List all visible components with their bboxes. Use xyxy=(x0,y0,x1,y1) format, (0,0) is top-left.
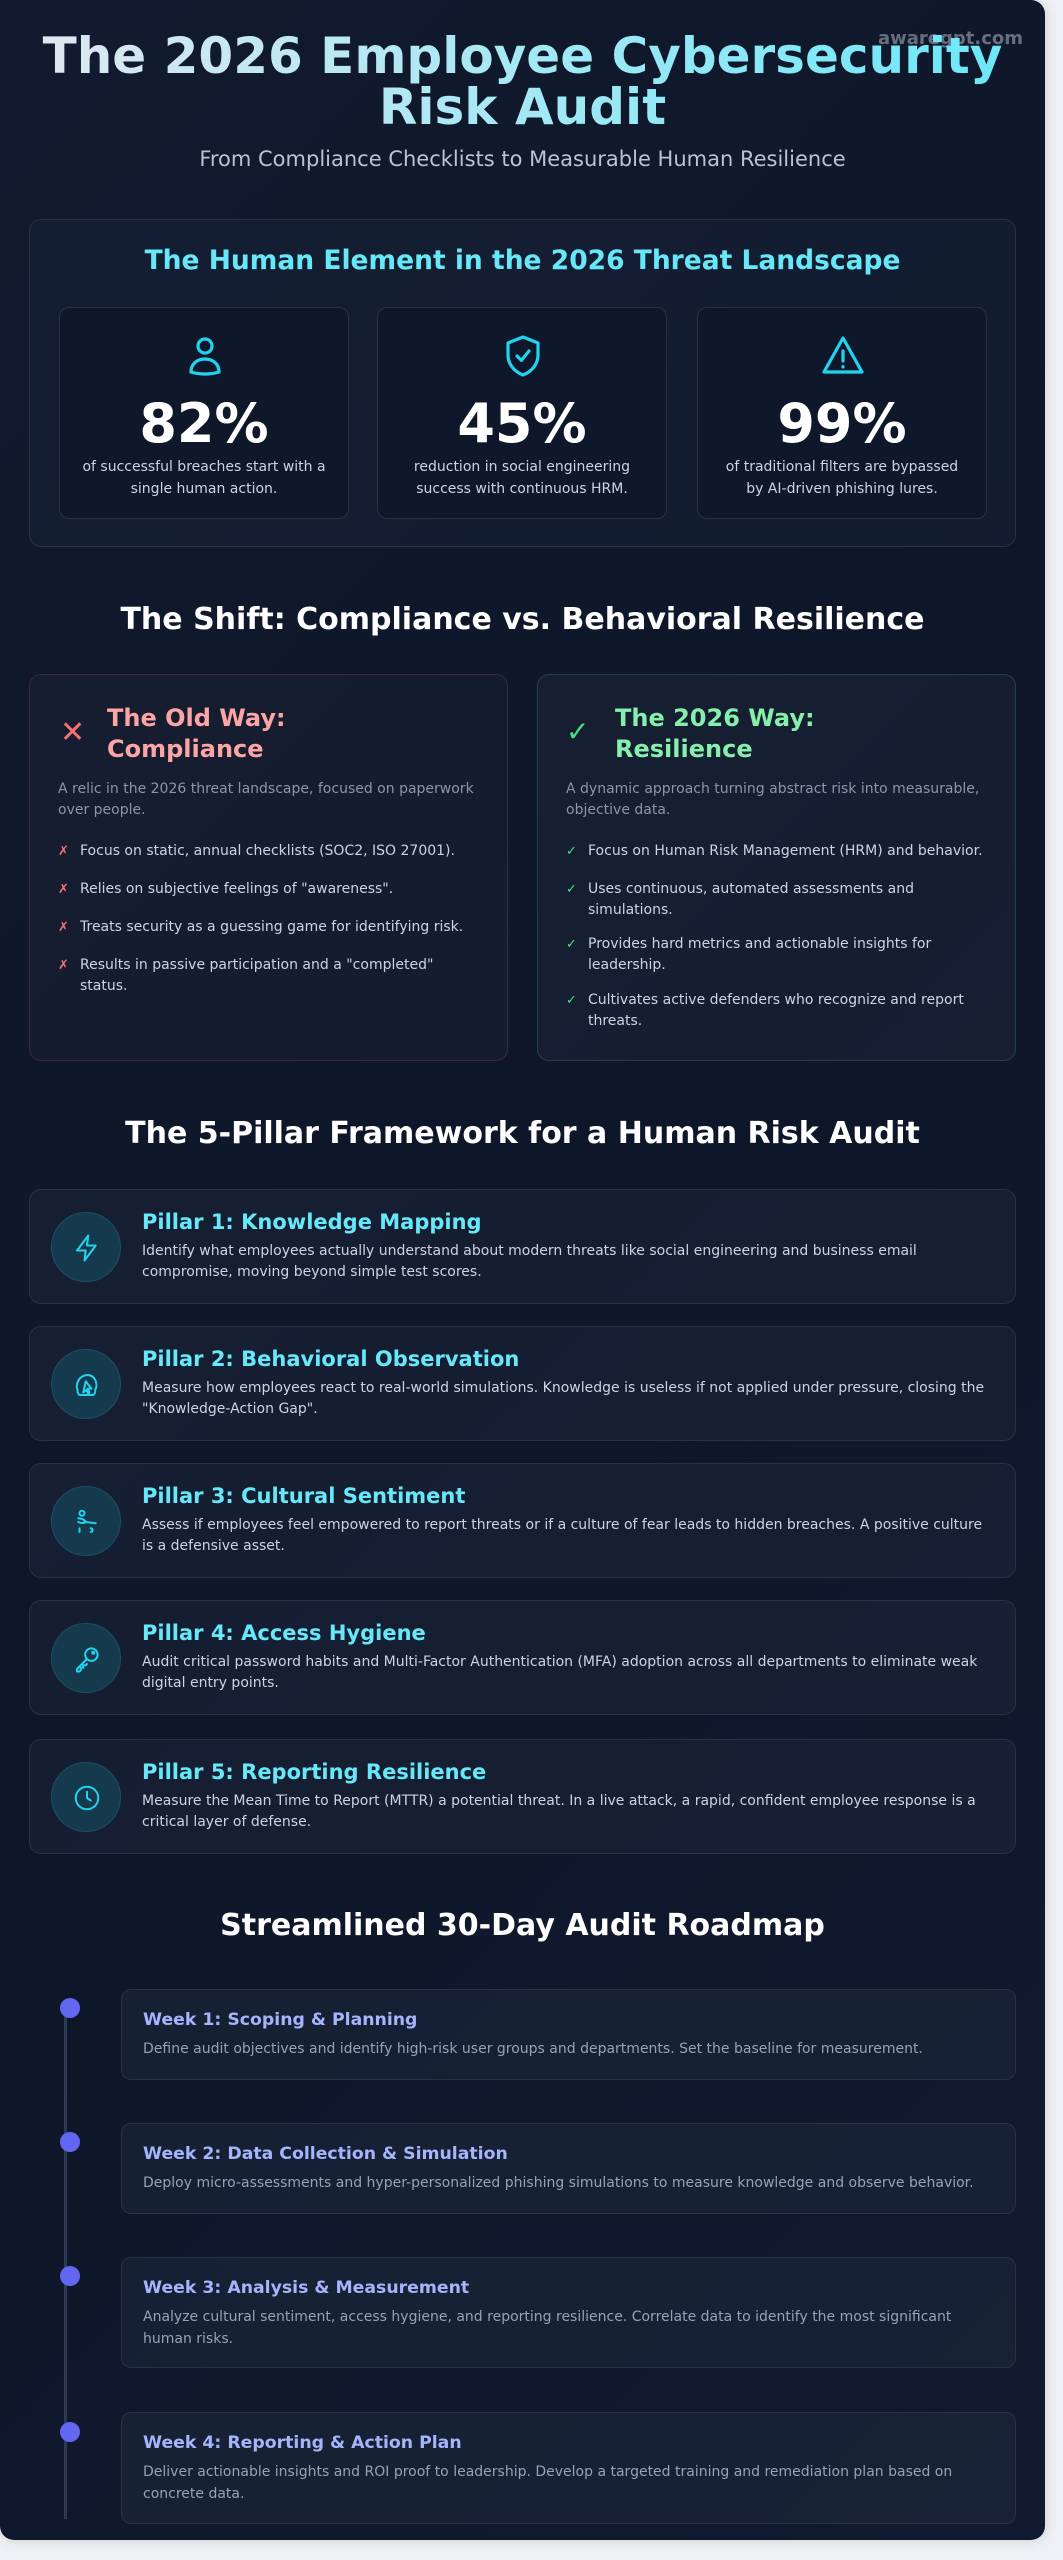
heading new way: The 2026 Way: xyxy=(615,704,815,732)
week 2: Week 2: Data Collection & Simulation xyxy=(143,2144,508,2164)
pillar 5: Pillar 5: Reporting Resilience xyxy=(142,1760,486,1784)
stat: 45%: reduction in social engineering xyxy=(414,459,630,475)
bullets: ✓ xyxy=(566,937,577,952)
bullets: ✓ xyxy=(566,844,577,859)
week 2: Deploy micro-assessments and hyper-personalized phishing simulations to measure knowledge and observe behavior. xyxy=(143,2175,974,2191)
description: A dynamic approach turning abstract risk into measurable, objective data. xyxy=(566,781,979,818)
bullets: Uses continuous, automated assessments and simulations. xyxy=(588,881,914,918)
bullets: Focus on Human Risk Management (HRM) and behavior. xyxy=(588,843,983,859)
icon: check: ✓ xyxy=(566,715,589,748)
pillar 5 xyxy=(29,1739,1016,1854)
pillar 4: Audit critical password habits and Multi-Factor Authentication (MFA) adoption across all departments to eliminate weak digital entry points. xyxy=(142,1654,977,1691)
icon: user xyxy=(189,337,221,376)
bullets: ✗ xyxy=(58,920,69,935)
week 3 xyxy=(121,2257,1016,2368)
icon: head cursor xyxy=(51,1349,121,1419)
week 1: Define audit objectives and identify high-risk user groups and departments. Set the baseline for measurement. xyxy=(143,2041,923,2057)
heading old way: Compliance xyxy=(107,735,264,763)
watermark: awaregpt.com xyxy=(878,28,1023,49)
icon: clock xyxy=(51,1762,121,1832)
week 3: Analyze cultural sentiment, access hygiene, and reporting resilience. Correlate data to identify the most significant human risks. xyxy=(143,2309,951,2347)
dot week 2 xyxy=(60,2132,80,2152)
heading new way xyxy=(615,704,815,763)
bullets: ✓ xyxy=(566,882,577,897)
dot week 3 xyxy=(60,2266,80,2286)
pillar 4: Pillar 4: Access Hygiene xyxy=(142,1621,426,1645)
icon: warning xyxy=(822,336,864,374)
bullets: ✗ xyxy=(58,882,69,897)
stat: 99%: of traditional filters are bypassed xyxy=(726,459,958,475)
icon: shield check xyxy=(506,335,540,377)
heading: 5 pillar: The 5-Pillar Framework for a Human Risk Audit xyxy=(125,1116,920,1151)
pillar 1: Identify what employees actually understand about modern threats like social engineering and business email compromise, moving beyond simple test scores. xyxy=(142,1243,917,1280)
stat: 45% xyxy=(377,307,667,519)
dot week 1 xyxy=(60,1998,80,2018)
pillar 3: Pillar 3: Cultural Sentiment xyxy=(142,1484,465,1508)
title: The 2026 Employee Cybersecurity xyxy=(43,27,1002,85)
icon: bolt xyxy=(51,1212,121,1282)
stat: 82%: single human action. xyxy=(131,481,277,497)
icon: key xyxy=(51,1623,121,1693)
stat: 45%: 45% xyxy=(457,392,587,455)
pillar 3 xyxy=(29,1463,1016,1578)
heading old way: The Old Way: xyxy=(107,704,286,732)
subtitle: From Compliance Checklists to Measurable Human Resilience xyxy=(199,147,846,171)
bullets: Provides hard metrics and actionable insights for leadership. xyxy=(588,936,931,973)
bullets: Focus on static, annual checklists (SOC2, ISO 27001). xyxy=(80,843,455,859)
pillar 1 xyxy=(29,1189,1016,1304)
pillar 2: Pillar 2: Behavioral Observation xyxy=(142,1347,519,1371)
heading new way: Resilience xyxy=(615,735,753,763)
stat: 82%: 82% xyxy=(139,392,269,455)
week 4 xyxy=(121,2412,1016,2524)
heading: roadmap: Streamlined 30-Day Audit Roadmap xyxy=(220,1908,825,1943)
panel: human element stats xyxy=(29,219,1016,547)
description: A relic in the 2026 threat landscape, focused on paperwork over people. xyxy=(58,781,474,818)
stat: 45%: success with continuous HRM. xyxy=(416,481,628,497)
pillar 2 xyxy=(29,1326,1016,1441)
bullets xyxy=(566,843,983,1029)
bullets: ✗ xyxy=(58,844,69,859)
icon: culture xyxy=(51,1486,121,1556)
week 1 xyxy=(121,1989,1016,2080)
week 4: Week 4: Reporting & Action Plan xyxy=(143,2433,462,2453)
heading: the shift: The Shift: Compliance vs. Behavioral Resilience xyxy=(120,602,925,637)
icon: x: ✕ xyxy=(60,715,85,750)
stat: 99%: 99% xyxy=(777,392,907,455)
bullets: Relies on subjective feelings of "awareness". xyxy=(80,881,393,897)
week 4: Deliver actionable insights and ROI proof to leadership. Develop a targeted training and remediation plan based on concrete data. xyxy=(143,2464,952,2502)
bullets xyxy=(58,843,463,994)
panel: old way xyxy=(29,674,508,1061)
bullets: ✗ xyxy=(58,958,69,973)
stat: 82%: of successful breaches start with a xyxy=(82,459,326,475)
week 1: Week 1: Scoping & Planning xyxy=(143,2010,417,2030)
title: Risk Audit xyxy=(379,78,666,136)
bullets: Treats security as a guessing game for identifying risk. xyxy=(80,919,463,935)
dot week 4 xyxy=(60,2422,80,2442)
stat: 82% xyxy=(59,307,349,519)
stat: 99%: by AI-driven phishing lures. xyxy=(746,481,938,497)
bullets: Results in passive participation and a "completed" status. xyxy=(80,957,433,994)
pillar 1: Pillar 1: Knowledge Mapping xyxy=(142,1210,482,1234)
week 3: Week 3: Analysis & Measurement xyxy=(143,2278,469,2298)
pillar 5: Measure the Mean Time to Report (MTTR) a potential threat. In a live attack, a rapid, confident employee response is a critical layer of defense. xyxy=(142,1793,976,1830)
week 2 xyxy=(121,2123,1016,2214)
pillar 4 xyxy=(29,1600,1016,1715)
bullets: Cultivates active defenders who recognize and report threats. xyxy=(588,992,964,1029)
panel heading: The Human Element in the 2026 Threat Landscape xyxy=(145,245,900,276)
heading old way xyxy=(107,704,286,763)
bullets: ✓ xyxy=(566,993,577,1008)
panel: 2026 way xyxy=(537,674,1016,1061)
title xyxy=(0,31,1045,133)
pillar 2: Measure how employees react to real-world simulations. Knowledge is useless if not applied under pressure, closing the "Knowledge-Action Gap". xyxy=(142,1380,984,1417)
pillar 3: Assess if employees feel empowered to report threats or if a culture of fear leads to hidden breaches. A positive culture is a defensive asset. xyxy=(142,1517,982,1554)
stat: 99% xyxy=(697,307,987,519)
timeline xyxy=(60,1998,80,2519)
